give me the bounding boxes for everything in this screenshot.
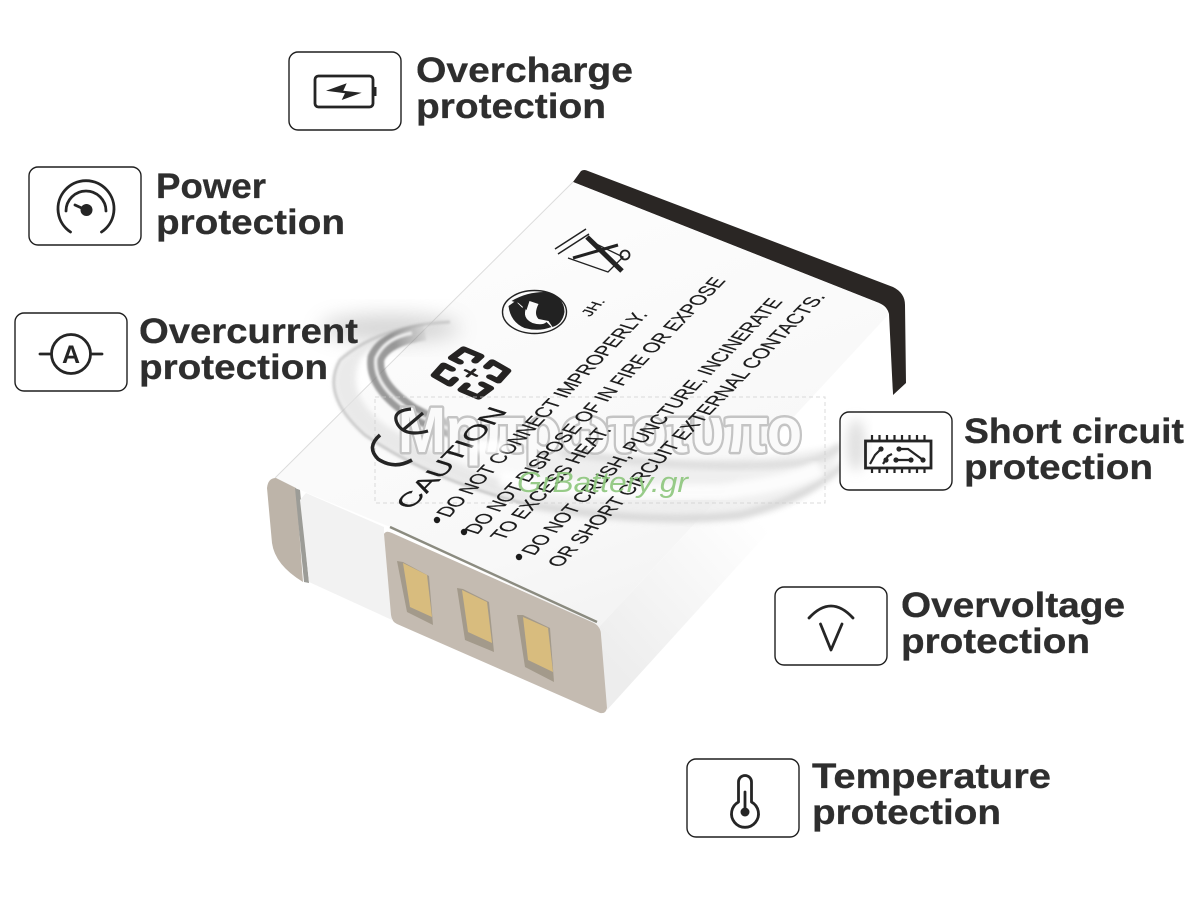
recycling logo (427, 347, 515, 399)
icon: ammeter (40, 334, 102, 374)
caution text: DO NOT DISPOSE OF IN FIRE OR EXPOSE (460, 275, 731, 537)
label: Temperature (812, 757, 1051, 796)
item: short circuit (840, 412, 1184, 490)
label: protection (416, 87, 606, 126)
icon: circuit chip (866, 435, 931, 473)
left edge line (275, 182, 573, 478)
CE mark (372, 409, 428, 465)
icon: gauge (58, 181, 114, 232)
watermark text: Μηπρωτοτυπο (398, 394, 802, 466)
label: Overcurrent (139, 312, 358, 351)
black top band (573, 170, 906, 395)
caution text: JH. (578, 297, 610, 318)
label: protection (901, 622, 1090, 661)
battery (267, 170, 906, 713)
caution text (390, 275, 831, 570)
terminal slot 3 (517, 615, 554, 682)
icon: voltmeter (809, 606, 853, 650)
white centre end piece (300, 493, 392, 620)
highlight over text (470, 440, 510, 454)
label: protection (964, 448, 1153, 487)
terminal slot 1 (397, 561, 433, 625)
side face (599, 317, 893, 710)
label: Overvoltage (901, 586, 1125, 625)
green dot logo (502, 290, 566, 334)
caution text: DO NOT CRUSH, PUNCTURE, INCINERATE (517, 296, 788, 558)
caution text: CAUTION (390, 404, 514, 512)
item: temperature (687, 757, 1051, 837)
caution text: TO EXCESS HEAT. (486, 424, 617, 543)
left grey end cap (267, 478, 303, 582)
label: protection (139, 348, 328, 387)
item: power (29, 167, 345, 245)
icon: ammeter: A (62, 341, 80, 369)
edge shadow above terminal panel (390, 527, 597, 622)
terminal slot 2 (457, 588, 494, 652)
swirl overlay (320, 315, 852, 523)
label: Overcharge (416, 51, 633, 90)
top face (275, 182, 889, 627)
label: Short circuit (964, 412, 1184, 451)
caution text: DO NOT CONNECT IMPROPERLY. (432, 309, 653, 520)
terminal panel (384, 532, 607, 713)
icon: thermometer (732, 776, 759, 827)
item: overvoltage (775, 586, 1125, 665)
label: protection (812, 793, 1001, 832)
crossed-out bin (555, 229, 630, 272)
caution text: OR SHORT CIRCUIT EXTERNAL CONTACTS. (543, 291, 831, 570)
item: overcurrent (15, 312, 358, 391)
watermark frame (375, 397, 825, 503)
shadow on box (847, 419, 865, 471)
cap separator strip (295, 488, 309, 583)
item: overcharge (289, 51, 633, 130)
label: Power (156, 167, 266, 206)
label: protection (156, 203, 345, 242)
icon: battery bolt (315, 76, 376, 107)
watermark brand: GrBattery.gr (517, 467, 689, 499)
